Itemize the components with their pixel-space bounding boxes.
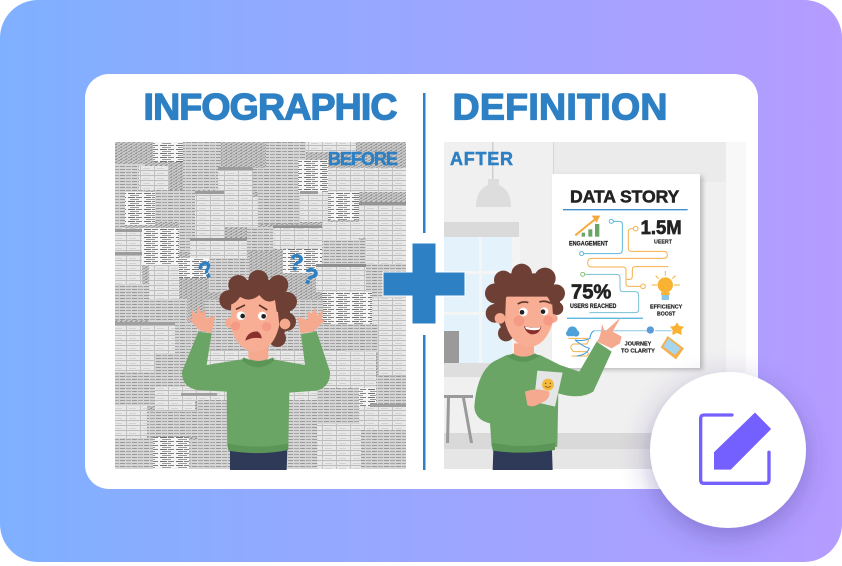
poster rules xyxy=(563,208,688,212)
question marks: ? xyxy=(287,248,305,276)
text: ueert: UEERT xyxy=(654,240,672,246)
hair fringe xyxy=(229,285,282,313)
text: efficiency boost: EFFICIENCY xyxy=(650,305,683,311)
question marks: ? xyxy=(299,262,322,291)
face xyxy=(231,295,279,352)
pointing hand xyxy=(597,317,622,348)
panel: before, wall of dense text and tables xyxy=(115,142,406,469)
poster title: DATA STORY xyxy=(570,186,680,206)
title: INFOGRAPHIC: INFOGRAPHIC xyxy=(144,86,398,128)
text: journey to clarity: TO CLARITY xyxy=(621,348,655,354)
green sweater xyxy=(182,332,330,451)
text: journey to clarity xyxy=(621,342,655,354)
chair xyxy=(444,395,473,443)
connector nodes xyxy=(580,219,645,289)
smile xyxy=(524,326,541,334)
text: journey to clarity: JOURNEY xyxy=(625,342,652,348)
right hand xyxy=(297,307,326,333)
face xyxy=(505,297,553,347)
hair xyxy=(485,264,565,341)
character: happy man with tablet xyxy=(474,264,622,470)
ears xyxy=(225,318,235,328)
tablet xyxy=(534,371,563,407)
white card xyxy=(85,74,758,489)
neck xyxy=(248,347,268,361)
plus sign xyxy=(383,243,465,324)
question marks: ? xyxy=(194,255,218,285)
character: confused man xyxy=(182,270,330,470)
title: DEFINITION: DEFINITION xyxy=(452,86,668,128)
holding hand xyxy=(525,389,549,406)
pants xyxy=(493,450,553,470)
poster: data story xyxy=(552,174,700,368)
chart icon: engagement xyxy=(575,216,600,237)
circle badge xyxy=(650,372,806,528)
icon: ceiling lamp xyxy=(476,179,511,207)
connector lines xyxy=(584,221,668,313)
label: BEFORE: BEFORE xyxy=(328,149,398,169)
label: AFTER: AFTER xyxy=(450,149,513,169)
question marks xyxy=(194,248,322,291)
vertical divider xyxy=(423,93,426,470)
pants xyxy=(230,450,287,470)
smiley xyxy=(542,379,554,391)
left hand xyxy=(188,307,215,333)
mouth xyxy=(245,331,262,341)
text: engagement: ENGAGEMENT xyxy=(569,241,608,248)
eyes and cheeks xyxy=(231,321,240,331)
text: efficiency boost xyxy=(650,305,683,318)
journey icons and lines xyxy=(566,322,684,359)
stat: 75%: 75% xyxy=(571,280,611,303)
text: efficiency boost: BOOST xyxy=(657,312,676,318)
stat: 1.5M: 1.5M xyxy=(641,218,682,239)
hair back xyxy=(219,270,297,347)
green sweater xyxy=(474,342,612,451)
icon: light bulb xyxy=(652,271,680,300)
panel: after, room scene xyxy=(444,142,746,469)
hair fringe xyxy=(503,281,555,305)
text: users reached: USERS REACHED xyxy=(570,304,617,310)
neck xyxy=(514,343,534,357)
eyes and cheeks xyxy=(514,316,524,326)
icon: edit pencil xyxy=(701,413,771,483)
ears xyxy=(495,313,505,324)
